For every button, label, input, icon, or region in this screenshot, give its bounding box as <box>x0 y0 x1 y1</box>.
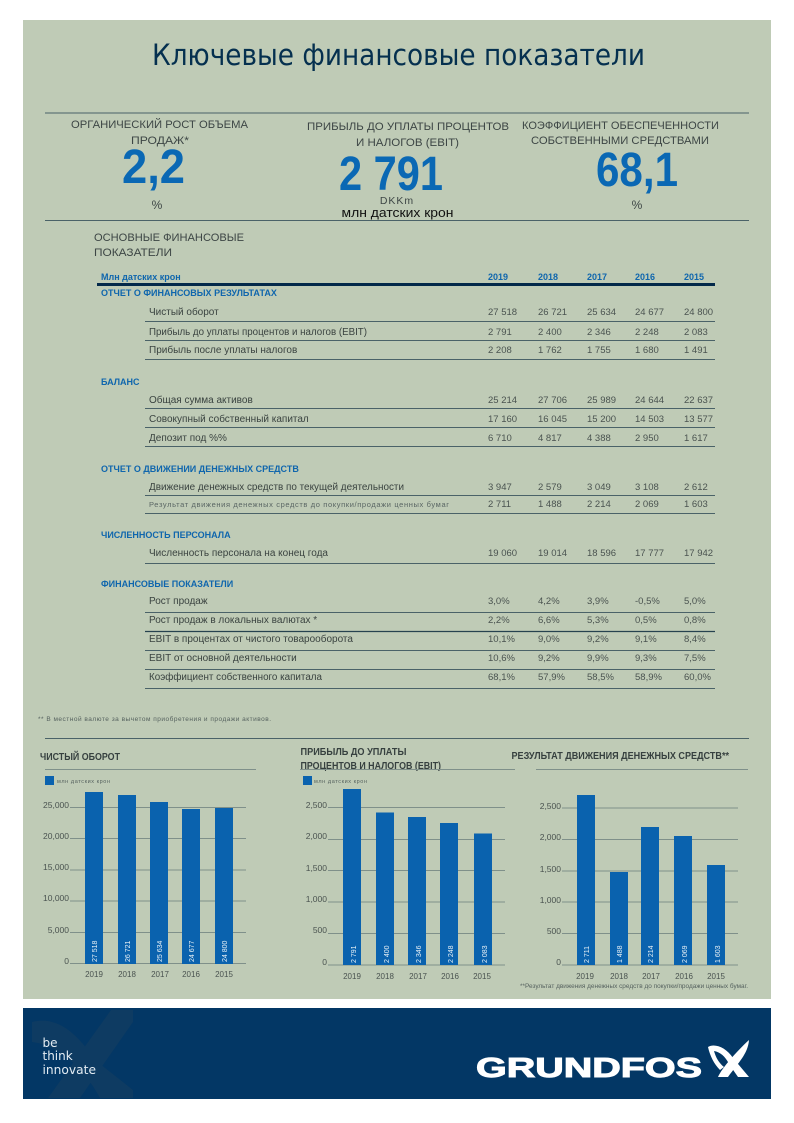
chart: EBIT: 2 346 <box>416 945 423 963</box>
section: financial ratios: Коэффициент собственного капитала <box>149 671 322 683</box>
section: income statement: 24 800 <box>684 307 713 318</box>
section: balance: 4 388 <box>587 433 611 444</box>
section: staff: 17 777 <box>635 548 664 559</box>
panel: KPI equity ratio: 68,1 <box>596 144 678 197</box>
chart: net turnover: 27 518 <box>92 940 99 962</box>
section: staff <box>101 530 715 564</box>
section: cash flow: 2 579 <box>538 482 562 493</box>
section: financial ratios: 7,5% <box>684 653 706 664</box>
section: income statement: 2 208 <box>488 345 512 356</box>
chart: cash flow result: 1,500 <box>540 864 561 874</box>
section: financial ratios: 57,9% <box>538 672 565 683</box>
section: financial ratios: 4,2% <box>538 596 560 607</box>
table header <box>97 272 715 286</box>
section: cash flow: Результат движения денежных средств до покупки/продажи ценных бумаг <box>149 500 449 509</box>
section: financial ratios: 9,9% <box>587 653 609 664</box>
section: cash flow: 1 603 <box>684 499 708 510</box>
panel: KPI equity ratio: СОБСТВЕННЫМИ СРЕДСТВАМИ <box>531 135 709 147</box>
tagline: think <box>42 1049 73 1063</box>
section: balance: 6 710 <box>488 433 512 444</box>
table header: 2015 <box>684 272 704 282</box>
chart: net turnover: 20,000 <box>43 831 69 841</box>
chart: cash flow result: 2019 <box>576 972 594 981</box>
table header: Млн датских крон <box>101 272 181 282</box>
section: balance: Депозит под %% <box>149 433 227 444</box>
chart: EBIT: 500 <box>313 925 327 935</box>
tagline: be <box>42 1036 58 1050</box>
section: financial ratios: 8,4% <box>684 634 706 645</box>
section: income statement: 1 755 <box>587 345 611 356</box>
footnote: ** В местной валюте за вычетом приобретения и продажи активов. <box>38 715 271 723</box>
section: balance: 16 045 <box>538 414 567 425</box>
section: financial ratios <box>101 579 715 688</box>
section: cash flow: ОТЧЕТ О ДВИЖЕНИИ ДЕНЕЖНЫХ СРЕДСТВ <box>101 464 299 474</box>
chart: cash flow result <box>512 751 748 981</box>
chart: cash flow result: 2016 <box>675 972 693 981</box>
chart: net turnover <box>40 750 256 979</box>
section: balance: 25 214 <box>488 395 517 406</box>
section: staff: 19 060 <box>488 548 517 559</box>
heading: key indicators <box>94 232 244 259</box>
section: income statement: 1 491 <box>684 345 708 356</box>
chart: EBIT: 2 083 <box>482 945 489 963</box>
section: financial ratios: ФИНАНСОВЫЕ ПОКАЗАТЕЛИ <box>101 579 233 589</box>
table header: 2018 <box>538 272 558 282</box>
chart: EBIT: 2015 <box>473 972 491 981</box>
section: financial ratios: 10,6% <box>488 653 515 664</box>
chart footnote: **Результат движения денежных средств до покупки/продажи ценных бумаг. <box>520 984 748 990</box>
section: financial ratios: 9,0% <box>538 634 560 645</box>
chart: net turnover: 15,000 <box>43 862 69 872</box>
chart: net turnover: 26 721 <box>125 940 132 962</box>
chart: cash flow result: 2017 <box>642 972 660 981</box>
chart: cash flow result: 500 <box>547 926 561 936</box>
table header: 2016 <box>635 272 655 282</box>
heading: key indicators: ПОКАЗАТЕЛИ <box>94 247 172 259</box>
tagline: innovate <box>42 1063 96 1077</box>
section: balance: 1 617 <box>684 433 708 444</box>
section: financial ratios: 0,5% <box>635 615 657 626</box>
chart: net turnover: 24 677 <box>189 940 196 962</box>
chart: EBIT: 2 400 <box>384 945 391 963</box>
chart: cash flow result: 0 <box>556 957 561 967</box>
section: cash flow: 3 049 <box>587 482 611 493</box>
panel: KPI EBIT: DKKm <box>380 195 414 207</box>
chart: EBIT: 2 791 <box>351 945 358 963</box>
section: income statement: 1 762 <box>538 345 562 356</box>
chart: cash flow result: 2 214 <box>648 945 655 963</box>
section: staff: Численность персонала на конец года <box>149 548 328 559</box>
section: financial ratios: 60,0% <box>684 672 711 683</box>
section: financial ratios: 3,9% <box>587 596 609 607</box>
section: staff: 19 014 <box>538 548 567 559</box>
section: financial ratios: 0,8% <box>684 615 706 626</box>
section: income statement: 2 791 <box>488 327 512 338</box>
section: income statement <box>101 288 715 360</box>
chart: net turnover: 25 634 <box>157 940 164 962</box>
panel: KPI organic growth <box>71 118 249 212</box>
section: financial ratios: EBIT в процентах от чистого товарооборота <box>149 633 353 645</box>
heading: key indicators: ОСНОВНЫЕ ФИНАНСОВЫЕ <box>94 232 244 244</box>
title: Ключевые финансовые показатели <box>152 38 645 72</box>
section: financial ratios: 2,2% <box>488 615 510 626</box>
section: balance: БАЛАНС <box>101 377 140 387</box>
section: financial ratios: 10,1% <box>488 634 515 645</box>
section: income statement: Чистый оборот <box>149 306 219 318</box>
chart: EBIT: 2018 <box>376 972 394 981</box>
section: balance <box>101 377 715 446</box>
section: cash flow: 3 947 <box>488 482 512 493</box>
section: income statement: ОТЧЕТ О ФИНАНСОВЫХ РЕЗУЛЬТАТАХ <box>101 288 277 298</box>
section: financial ratios: Рост продаж в локальных валютах * <box>149 615 317 626</box>
section: financial ratios: 6,6% <box>538 615 560 626</box>
section: income statement: 26 721 <box>538 307 567 318</box>
section: financial ratios: EBIT от основной деятельности <box>149 653 297 664</box>
panel: KPI organic growth: ОРГАНИЧЕСКИЙ РОСТ ОБЪЕМА <box>71 118 249 131</box>
section: income statement: 1 680 <box>635 345 659 356</box>
section: balance: Общая сумма активов <box>149 394 253 406</box>
chart: net turnover: 2015 <box>215 970 233 979</box>
section: balance: 17 160 <box>488 414 517 425</box>
section: balance: 2 950 <box>635 433 659 444</box>
chart: EBIT: 2019 <box>343 972 361 981</box>
section: income statement: 24 677 <box>635 307 664 318</box>
panel: KPI organic growth: 2,2 <box>122 141 185 194</box>
section: financial ratios: 9,3% <box>635 653 657 664</box>
section: balance: 25 989 <box>587 395 616 406</box>
chart: cash flow result: 1 603 <box>715 945 722 963</box>
table header: 2017 <box>587 272 607 282</box>
section: cash flow <box>101 464 715 514</box>
chart: cash flow result: 2018 <box>610 972 628 981</box>
panel: KPI EBIT <box>307 121 509 220</box>
financial table <box>97 272 715 688</box>
section: financial ratios: 5,3% <box>587 615 609 626</box>
section: income statement: 2 248 <box>635 327 659 338</box>
section: financial ratios: 9,2% <box>538 653 560 664</box>
panel: KPI equity ratio <box>522 120 719 212</box>
section: financial ratios: 5,0% <box>684 596 706 607</box>
logo X icon <box>708 1040 749 1077</box>
section: staff: ЧИСЛЕННОСТЬ ПЕРСОНАЛА <box>101 530 231 540</box>
watermark X <box>32 1010 133 1098</box>
chart: EBIT: ПРИБЫЛЬ ДО УПЛАТЫ <box>300 747 407 758</box>
legend: млн датских крон <box>57 779 110 785</box>
panel: KPI equity ratio: % <box>632 198 643 212</box>
section: staff: 17 942 <box>684 548 713 559</box>
section: cash flow: 2 214 <box>587 499 611 510</box>
chart: net turnover: 25,000 <box>43 800 69 810</box>
section: balance: 27 706 <box>538 395 567 406</box>
section: income statement: 25 634 <box>587 307 616 318</box>
tagline <box>42 1036 96 1077</box>
section: cash flow: 2 711 <box>488 499 511 510</box>
panel: KPI organic growth: % <box>152 198 163 212</box>
section: financial ratios: 3,0% <box>488 596 510 607</box>
chart: net turnover: ЧИСТЫЙ ОБОРОТ <box>40 750 120 763</box>
panel: KPI EBIT: 2 791 <box>339 148 443 201</box>
section: balance: 22 637 <box>684 395 713 406</box>
chart: net turnover: 2018 <box>118 970 136 979</box>
section: balance: 24 644 <box>635 395 664 406</box>
section: income statement: Прибыль до уплаты процентов и налогов (EBIT) <box>149 326 367 338</box>
chart: EBIT: 2,500 <box>306 800 327 810</box>
section: balance: 14 503 <box>635 414 664 425</box>
section: financial ratios: 68,1% <box>488 672 515 683</box>
legend <box>45 776 110 785</box>
chart: cash flow result: 2,500 <box>540 801 561 811</box>
chart: cash flow result: РЕЗУЛЬТАТ ДВИЖЕНИЯ ДЕНЕЖНЫХ СРЕДСТВ** <box>512 751 729 762</box>
logo wordmark: GRUNDFOS <box>476 1052 702 1083</box>
chart: net turnover: 2019 <box>85 970 103 979</box>
legend <box>303 776 367 785</box>
chart: net turnover: 24 800 <box>222 940 229 962</box>
section: income statement: 27 518 <box>488 307 517 318</box>
section: financial ratios: 9,1% <box>635 634 657 645</box>
footer banner <box>23 1008 771 1099</box>
chart: net turnover: 10,000 <box>43 893 69 903</box>
chart: EBIT: 1,000 <box>306 894 327 904</box>
chart: EBIT: 0 <box>322 957 327 967</box>
section: income statement: 2 400 <box>538 327 562 338</box>
section: cash flow: 3 108 <box>635 482 659 493</box>
section: balance: 4 817 <box>538 433 562 444</box>
chart: cash flow result: 2 711 <box>584 946 591 963</box>
chart: EBIT: 1,500 <box>306 863 327 873</box>
section: cash flow: 2 612 <box>684 482 708 493</box>
section: financial ratios: 58,9% <box>635 672 662 683</box>
section: financial ratios: -0,5% <box>635 596 660 607</box>
chart: EBIT: 2016 <box>441 972 459 981</box>
panel: KPI EBIT: И НАЛОГОВ (EBIT) <box>356 137 459 149</box>
table header: 2019 <box>488 272 508 282</box>
chart: cash flow result: 2,000 <box>540 832 561 842</box>
chart: cash flow result: 1 488 <box>617 945 624 963</box>
section: financial ratios: 9,2% <box>587 634 609 645</box>
chart: EBIT: 2,000 <box>306 831 327 841</box>
legend: млн датских крон <box>314 779 367 785</box>
section: cash flow: 1 488 <box>538 499 562 510</box>
section: cash flow: 2 069 <box>635 499 659 510</box>
chart: EBIT: 2017 <box>409 972 427 981</box>
panel: KPI EBIT: ПРИБЫЛЬ ДО УПЛАТЫ ПРОЦЕНТОВ <box>307 121 509 133</box>
section: income statement: 2 346 <box>587 327 611 338</box>
chart: net turnover: 2016 <box>182 970 200 979</box>
section: balance: Совокупный собственный капитал <box>149 413 309 425</box>
chart: EBIT: ПРОЦЕНТОВ И НАЛОГОВ (EBIT) <box>300 761 441 772</box>
chart: net turnover: 0 <box>64 956 69 966</box>
chart: net turnover: 5,000 <box>48 925 69 935</box>
chart: EBIT: 2 248 <box>448 945 455 963</box>
section: income statement: 2 083 <box>684 327 708 338</box>
chart: cash flow result: 2015 <box>707 972 725 981</box>
chart: cash flow result: 1,000 <box>540 895 561 905</box>
panel: KPI equity ratio: КОЭФФИЦИЕНТ ОБЕСПЕЧЕННОСТИ <box>522 120 719 132</box>
section: balance: 13 577 <box>684 414 713 425</box>
chart: net turnover: 2017 <box>151 970 169 979</box>
chart: cash flow result: 2 069 <box>682 945 689 963</box>
section: income statement: Прибыль после уплаты налогов <box>149 344 297 356</box>
chart: EBIT <box>300 747 515 981</box>
section: balance: 15 200 <box>587 414 616 425</box>
section: financial ratios: 58,5% <box>587 672 614 683</box>
section: financial ratios: Рост продаж <box>149 596 208 607</box>
panel: KPI organic growth: ПРОДАЖ* <box>131 135 190 147</box>
section: cash flow: Движение денежных средств по текущей деятельности <box>149 482 404 493</box>
panel: KPI EBIT: млн датских крон <box>342 205 454 220</box>
section: staff: 18 596 <box>587 548 616 559</box>
